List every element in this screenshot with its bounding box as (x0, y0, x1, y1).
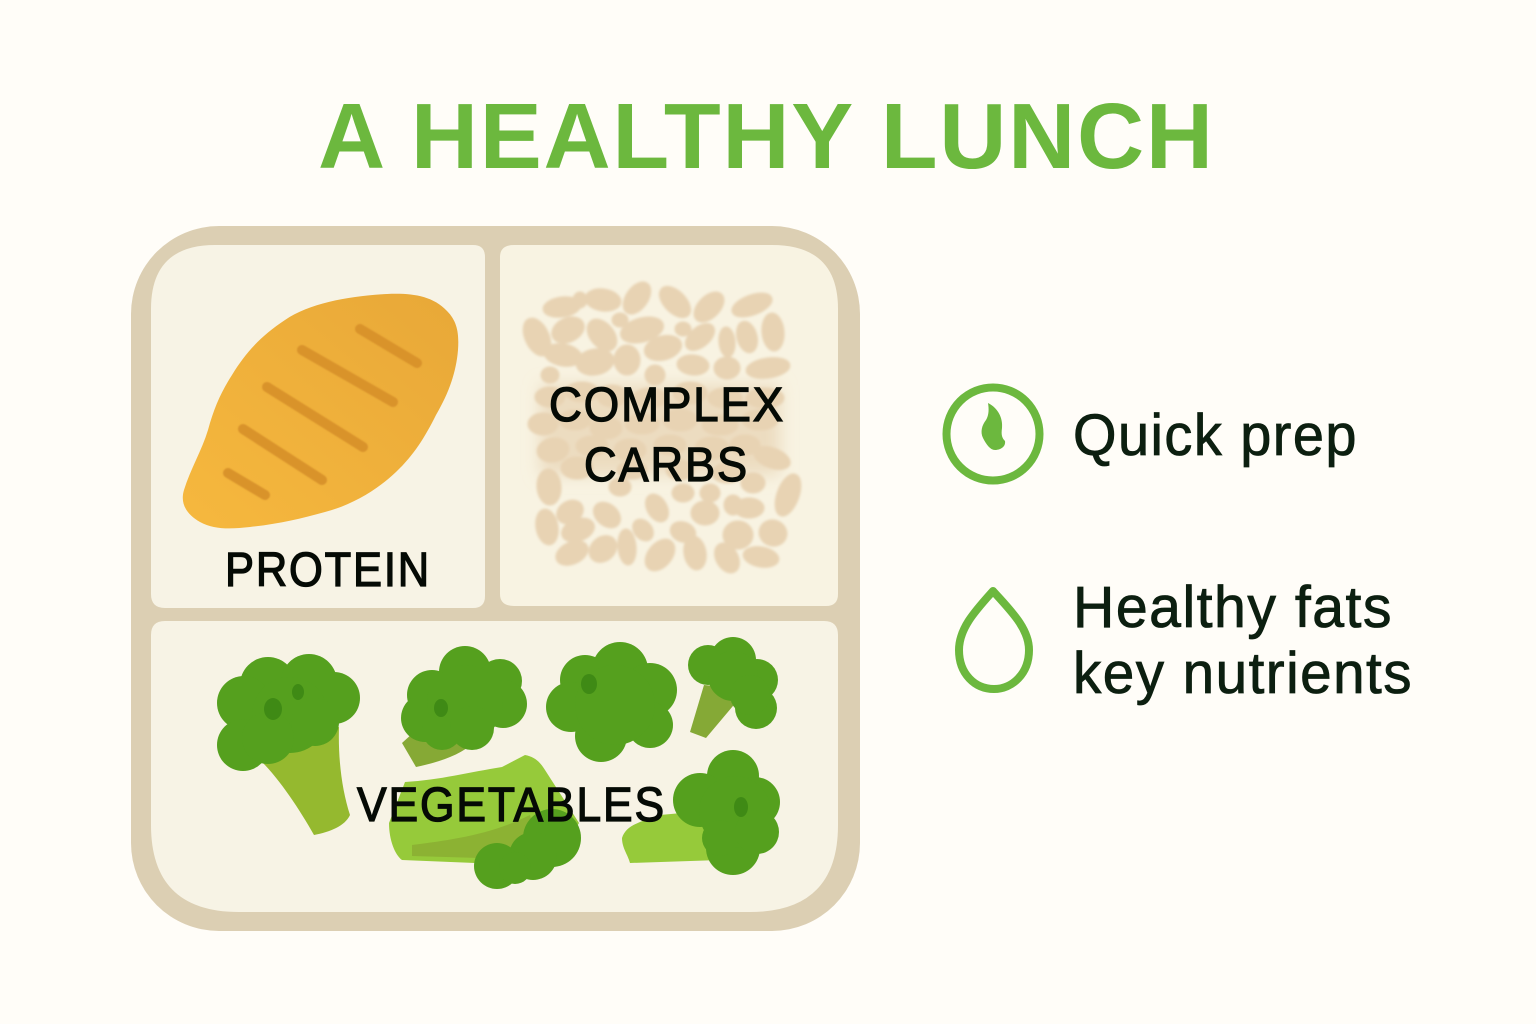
icon: oil drop (959, 591, 1029, 689)
panel: vegetables (151, 621, 838, 912)
quick prep text: Quick prep (1073, 403, 1358, 468)
healthy fats text: Healthy fats (1073, 575, 1393, 640)
lunch tray (131, 226, 860, 931)
chicken breast (183, 294, 458, 528)
complex carbs label: COMPLEX (549, 379, 785, 432)
complex carbs label (549, 379, 785, 492)
callout: quick prep (946, 388, 1358, 480)
healthy fats text (1073, 575, 1413, 706)
icon: clock with flame (946, 388, 1040, 480)
panel: complex carbs (500, 245, 838, 606)
broccoli 3 (546, 642, 677, 762)
protein label: PROTEIN (225, 544, 431, 597)
callout: healthy fats (959, 575, 1413, 706)
tray frame (131, 226, 860, 931)
panel: protein (151, 245, 485, 608)
broccoli 2 (401, 646, 527, 767)
broccoli 5 (622, 750, 780, 875)
broccoli 6 (lower centre) (389, 755, 581, 889)
title: A HEALTHY LUNCH (318, 84, 1213, 188)
broccoli 1 (217, 654, 360, 835)
healthy fats text: key nutrients (1073, 641, 1413, 706)
vegetables compartment (151, 621, 838, 912)
grains (519, 278, 805, 576)
protein compartment (151, 245, 485, 608)
vegetables label: VEGETABLES (357, 779, 666, 832)
broccoli 4 (688, 637, 778, 738)
complex carbs label: CARBS (584, 439, 749, 492)
carbs compartment (500, 245, 838, 606)
